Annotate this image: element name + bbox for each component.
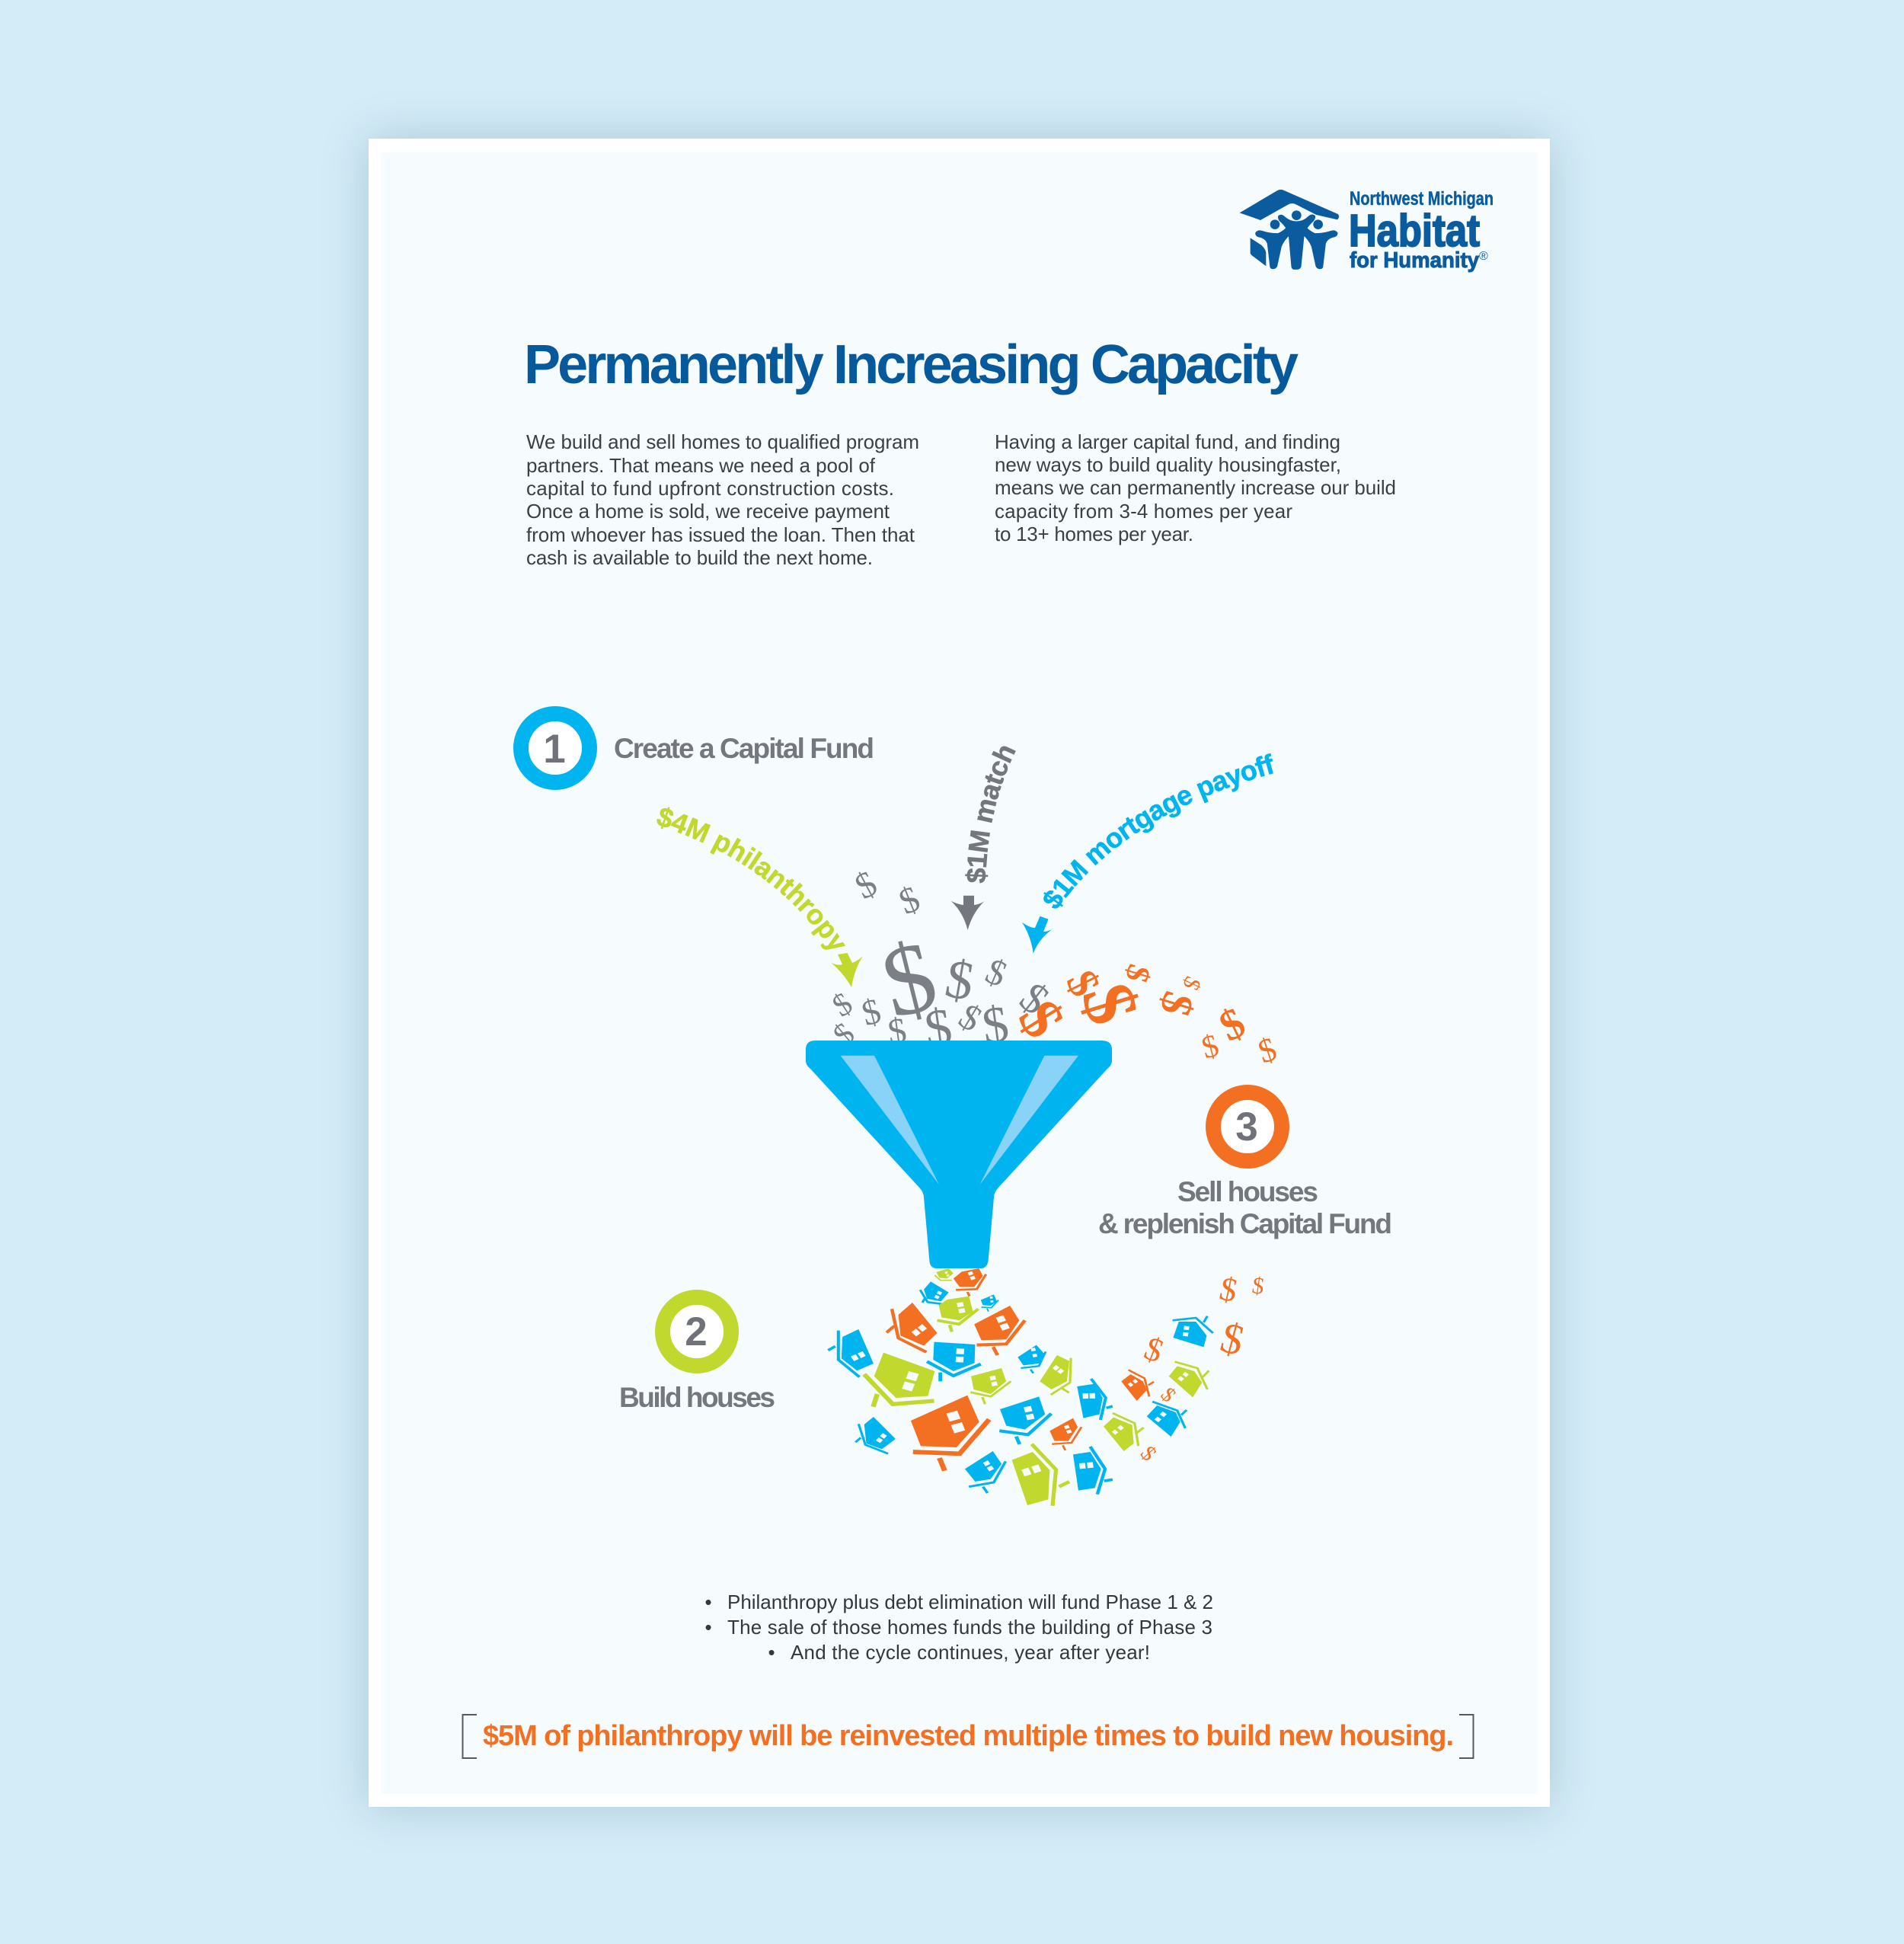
panel: white document card [369,139,1550,1807]
logo text: registered mark: ® [1479,250,1488,263]
house: blue [1073,1447,1113,1495]
icon: step 3 ring [1213,1092,1282,1161]
bullet list: Philanthropy plus debt elimination will fund Phase 1 & 2 [727,1591,1213,1613]
house: orange [1121,1370,1154,1401]
house: orange [974,1306,1025,1355]
step 1 number: 1 [543,727,566,772]
house: blue [999,1396,1051,1444]
house: blue [965,1451,1005,1493]
house: green [1104,1413,1144,1451]
bullet list: • [704,1616,712,1639]
step 3 heading, line 2: & replenish Capital Fund [1098,1208,1392,1239]
house: blue [1017,1345,1046,1373]
house: orange [1049,1418,1081,1450]
house: green [970,1368,1011,1404]
curved label: $4M philanthropy: $4M philanthropy [656,807,845,950]
gray dollar signs entering funnel: $ [827,1016,861,1054]
text block: right intro paragraph: Having a larger capital fund, and finding [995,430,1340,453]
gray dollar signs entering funnel: $ [1011,973,1058,1025]
step 2 heading: Build houses [619,1382,775,1413]
gray dollar signs entering funnel: $ [952,996,989,1040]
gray dollar signs entering funnel: $ [858,991,885,1034]
logo text: Northwest Michigan: Northwest Michigan [1350,188,1493,209]
gray dollar signs entering funnel: $ [871,919,947,1040]
title: Permanently Increasing Capacity [524,334,1299,395]
bullet list: The sale of those homes funds the building of Phase 3 [727,1616,1212,1639]
text block: left intro paragraph: from whoever has issued the loan. Then that [526,523,915,546]
orange dollar signs arc, upper: $ [1212,998,1253,1051]
orange dollar signs arc, upper: $ [1066,974,1155,1034]
bullet list [704,1591,1213,1664]
text block: left intro paragraph: partners. That means we need a pool of [526,454,876,477]
curved label: $1M mortgage payoff: $1M mortgage payoff [1043,753,1273,909]
house: big green, lower [1012,1444,1069,1506]
icon: house and people mark [1240,190,1339,269]
house: blue [927,1342,981,1381]
gray dollar signs entering funnel [826,863,1058,1060]
step 2 number: 2 [685,1309,708,1354]
house: blue [1147,1402,1187,1437]
gray dollar signs entering funnel: $ [826,986,859,1025]
bullet list: • [768,1641,775,1664]
arrow: green philanthropy [832,953,863,987]
text block: left intro paragraph: We build and sell homes to qualified program [526,430,919,453]
step 1 heading: Create a Capital Fund [614,733,874,764]
orange dollar signs arc, upper: $ [1118,961,1157,986]
orange dollar signs arc, lower: $ [1216,1313,1249,1365]
orange dollar signs arc, upper: $ [1177,973,1207,995]
orange dollar signs arc, lower [1136,1270,1266,1466]
text block: left intro paragraph: Once a home is sold, we receive payment [526,500,890,523]
step 3: sell houses and replenish [1098,1092,1392,1239]
logo text: for Humanity: for Humanity [1350,248,1479,273]
logo text: Habitat: Habitat [1349,206,1480,256]
step 3 heading, line 1: Sell houses [1177,1176,1318,1207]
house: blue [920,1281,949,1305]
house: blue [855,1417,896,1453]
callout text: $5M of philanthropy will be reinvested multiple times to build new housing. [483,1720,1454,1752]
bracket: left [463,1715,477,1758]
icon: step 1 ring [521,714,589,782]
house: tiny green [934,1268,954,1281]
gray dollar signs entering funnel: $ [980,951,1012,995]
house: orange [954,1268,986,1297]
text block: right intro paragraph: capacity from 3-4 homes per year [995,500,1292,523]
text block: left intro paragraph: capital to fund upfront construction costs. [526,477,894,500]
callout: bracketed conclusion [463,1715,1473,1758]
house: blue [828,1329,874,1377]
house: green [938,1297,978,1332]
orange dollar signs arc, upper: $ [1006,989,1078,1049]
house: blue [1077,1379,1113,1420]
orange dollar signs arc, lower: $ [1251,1271,1266,1300]
gray dollar signs entering funnel: $ [921,998,956,1060]
orange dollar signs arc, lower: $ [1156,1383,1180,1407]
gray dollar signs entering funnel: $ [941,948,979,1012]
gray dollar signs entering funnel: $ [848,863,883,907]
bracket: right [1459,1715,1473,1758]
orange dollar signs arc, upper [1006,961,1281,1071]
step 3 number: 3 [1235,1105,1258,1149]
step 1: create a capital fund [521,714,874,782]
house: blue, top right [1173,1316,1213,1347]
houses cluster [828,1268,1213,1506]
logo: Northwest Michigan Habitat for Humanity [1240,188,1493,273]
text block: left intro paragraph [526,430,919,569]
funnel highlight: right [980,1056,1078,1185]
house: big orange [911,1396,989,1471]
text block: right intro paragraph: new ways to build quality housingfaster, [995,453,1341,476]
icon: funnel [806,1041,1112,1268]
house: green [1040,1355,1071,1395]
bullet list: And the cycle continues, year after year! [791,1641,1150,1664]
arrow: blue mortgage payoff [1022,916,1053,954]
house: green [1169,1362,1209,1397]
orange dollar signs arc, upper: $ [1150,986,1204,1022]
gray dollar signs entering funnel: $ [885,1010,909,1053]
orange dollar signs arc, upper: $ [1056,963,1110,1004]
orange dollar signs arc, lower: $ [1136,1441,1161,1466]
arrow: gray match [951,896,984,930]
funnel highlight: left [841,1056,939,1185]
orange dollar signs arc, lower: $ [1216,1270,1241,1309]
text block: right intro paragraph: to 13+ homes per year. [995,523,1193,545]
orange dollar signs arc, upper: $ [1198,1028,1222,1066]
text block: right intro paragraph: means we can permanently increase our build [995,476,1396,499]
step 2: build houses [619,1297,775,1413]
text block: left intro paragraph: cash is available to build the next home. [526,546,873,569]
gray dollar signs entering funnel: $ [979,994,1012,1055]
icon: step 2 ring [663,1297,731,1366]
house: big green [864,1353,934,1407]
text block: right intro paragraph [995,430,1396,545]
house: orange [887,1303,938,1352]
orange dollar signs arc, lower: $ [1139,1329,1168,1370]
bullet list: • [704,1591,712,1613]
curved label: $1M match: $1M match [965,747,1016,884]
orange dollar signs arc, upper: $ [1254,1030,1281,1071]
house: tiny blue [981,1294,998,1312]
gray dollar signs entering funnel: $ [893,878,925,922]
